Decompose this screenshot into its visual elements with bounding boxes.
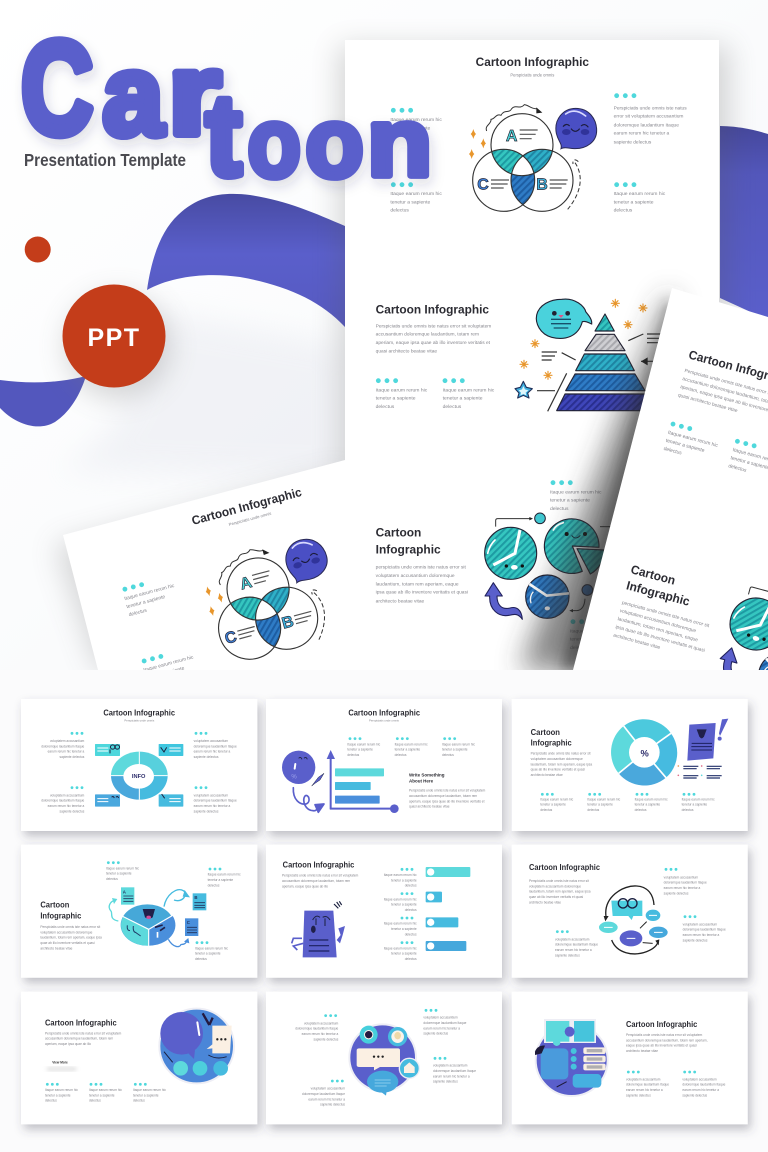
- paragraph: accusantium doloremque laudantium, totam rem: [282, 879, 351, 883]
- panel: card 1 donut: [21, 699, 257, 831]
- slide grid: [21, 699, 748, 1124]
- hero background: [0, 0, 768, 676]
- text block bottom right: tenetur a sapiente: [614, 199, 654, 205]
- panel: card 8: [266, 992, 502, 1124]
- text blocks: earum rerum hic tenetur a: [302, 1032, 339, 1036]
- text blocks: delectus: [133, 1099, 145, 1103]
- panel: tilted slide right: perspiciatis unde omnis iste natus error sit: [621, 601, 710, 629]
- chart: horizontal bars: [327, 750, 399, 813]
- text blocks: delectus: [45, 1099, 57, 1103]
- text block bottom left: [390, 182, 442, 214]
- panel: tilted slide bottom left: tenetur a sapiente: [126, 594, 166, 610]
- text blocks: tenetur a sapiente: [45, 1093, 71, 1097]
- text blocks: doloremque laudantium Itaque: [423, 1021, 467, 1025]
- panel: tilted slide bottom left: Cartoon Infographic: [190, 485, 303, 528]
- text blocks: earum rerum hic tenetur a: [683, 933, 720, 937]
- text blocks: Itaque earum rerum hic: [195, 946, 228, 950]
- text block bottom left: sapiente delectus: [60, 809, 85, 813]
- heading: Cartoon Infographic: [103, 708, 176, 717]
- panel: main slide: [345, 40, 719, 670]
- ribbon shadow: [0, 194, 345, 670]
- paragraph: Perspiciatis unde omnis iste natus error sit voluptatem: [409, 789, 485, 793]
- panel: card 9: [512, 992, 748, 1124]
- text blocks: delectus: [405, 957, 417, 961]
- paragraph: Perspiciatis unde omnis iste natus error sit voluptatem: [376, 324, 491, 329]
- text block top left: [390, 108, 442, 131]
- documents and arrows: B: [194, 895, 198, 900]
- paragraph: quae ab illo inventore veritatis et quasi: [531, 768, 585, 772]
- title: Cartoon: n: [367, 88, 432, 197]
- text blocks: tenetur a sapiente: [391, 878, 417, 882]
- panel: card 6 cycle: [512, 845, 748, 978]
- text blocks: tenetur a sapiente: [133, 1093, 159, 1097]
- text blocks: [555, 868, 726, 957]
- text block bottom right: [194, 786, 237, 813]
- text block top left: sapiente delectus: [60, 755, 85, 759]
- title: Cartoon: r: [168, 29, 221, 159]
- heading: Cartoon: [531, 727, 560, 737]
- text block top right: doloremque laudantium Itaque: [194, 744, 237, 748]
- illustration: puzzle badge: [535, 1019, 608, 1096]
- text block 3: [442, 737, 475, 757]
- text blocks row: Itaque earum rerum hic: [587, 797, 620, 801]
- paragraph: Perspiciatis unde omnis iste natus error sit voluptatem: [626, 1033, 702, 1037]
- text blocks: sapiente delectus: [682, 1093, 708, 1097]
- paragraph: Perspiciatis unde omnis iste natus error sit voluptatem: [282, 874, 358, 878]
- text block top right: doloremque laudantium Itaque: [614, 122, 679, 128]
- main slide shadow: [328, 35, 740, 464]
- paragraph: architecto beatae vitae: [376, 598, 425, 604]
- text block top left: tenetur a sapiente: [390, 125, 430, 131]
- heading: Cartoon Infographic: [348, 708, 421, 717]
- badge: PPT: [62, 284, 170, 398]
- text blocks: earum rerum hic tenetur a: [308, 1097, 345, 1101]
- text block 3: tenetur a sapiente: [442, 748, 468, 752]
- text block 1: tenetur a sapiente: [347, 748, 373, 752]
- text block bottom right: sapiente delectus: [194, 809, 219, 813]
- text blocks row: tenetur a sapiente: [682, 803, 707, 807]
- text block bottom right: doloremque laudantium Itaque: [194, 799, 237, 803]
- heading: Cartoon: [376, 526, 421, 540]
- text block lower: Itaque earum rerum hic: [570, 628, 622, 634]
- text blocks: [626, 1071, 726, 1097]
- text blocks: Itaque earum rerum hic: [106, 866, 139, 870]
- text block bottom left: [41, 786, 85, 813]
- panel: tilted slide right: delectus: [663, 446, 683, 457]
- text block bottom left: Itaque earum rerum hic: [390, 191, 442, 197]
- text block bottom right: [614, 182, 666, 214]
- text block 3: delectus: [442, 753, 454, 757]
- panel: tilted slide bottom left: delectus: [128, 608, 148, 618]
- chart: venn diagram: [469, 105, 597, 213]
- panel: tilted slide right: quasi architecto beatae vitae: [677, 392, 738, 414]
- text block 2: delectus: [395, 753, 407, 757]
- arrow: squiggle: [293, 788, 324, 812]
- text blocks row: Itaque earum rerum hic: [540, 797, 573, 801]
- text blocks: voluptatem accusantium: [682, 1077, 717, 1081]
- text blocks: earum rerum hic tenetur a: [423, 1026, 460, 1030]
- text blocks: doloremque laudantium Itaque: [664, 881, 707, 885]
- text block top left: voluptatem accusantium: [50, 739, 84, 743]
- character: document: [677, 719, 728, 778]
- heading: Cartoon Infographic: [529, 863, 601, 872]
- panel: tilted slide bottom left: Perspiciatis unde omnis: [228, 511, 272, 527]
- paragraph: perspiciatis unde omnis iste natus error sit: [376, 566, 466, 571]
- panel: card 3 pie: Infographic: [531, 738, 572, 748]
- paragraph: accusantium doloremque laudantium, totam rem: [45, 1037, 114, 1041]
- text blocks row: delectus: [540, 808, 553, 812]
- button: [47, 1061, 77, 1070]
- text block 1: [347, 737, 381, 757]
- text blocks: voluptatem accusantium: [555, 937, 589, 941]
- panel: card 2 bar chart: [266, 699, 502, 831]
- text block top left: Itaque earum rerum hic: [390, 117, 442, 123]
- text block left: delectus: [376, 404, 395, 410]
- text blocks: tenetur a sapiente: [391, 952, 417, 956]
- panel: tilted slide bottom left: B: [280, 613, 296, 633]
- paragraph: voluptatem accusantium doloremque: [529, 884, 581, 888]
- panel: card 7: [21, 992, 257, 1124]
- panel: card 1 donut: Perspiciatis unde omnis: [124, 718, 155, 722]
- text block bottom right: delectus: [614, 208, 633, 214]
- text block top right: voluptatem accusantium: [194, 739, 228, 743]
- text blocks row: delectus: [587, 808, 600, 812]
- text blocks: doloremque laudantium Itaque: [626, 1083, 669, 1087]
- paragraph: quasi architecto beatae vitae: [376, 349, 437, 355]
- text block right: Itaque earum rerum hic: [443, 387, 494, 393]
- paragraph: architecto beatae vitae: [531, 773, 563, 777]
- text block top left: [41, 732, 85, 759]
- panel: tilted slide bottom left: [63, 460, 345, 670]
- heading: Cartoon: [40, 899, 69, 909]
- paragraph: Perspiciatis unde omnis iste natus error sit voluptatem: [45, 1031, 121, 1035]
- chart: progress bars: [426, 867, 470, 951]
- panel: card 5 progress bars: [266, 845, 502, 978]
- text block right: tenetur a sapiente: [443, 396, 483, 402]
- paragraph: architecto beatae vitae: [40, 946, 73, 950]
- heading: Infographic: [376, 542, 441, 556]
- illustration: chat badge: [159, 1009, 234, 1083]
- text blocks: Itaque earum rerum hic: [208, 873, 241, 877]
- purple ribbon lower left: [0, 376, 86, 426]
- text block top right: sapiente delectus: [194, 755, 219, 759]
- panel: tilted slide right: ipsa quae ab illo inventore veritatis et quasi: [615, 624, 705, 654]
- text blocks: earum rerum hic tenetur a: [664, 886, 701, 890]
- text block top right: Perspiciatis unde omnis iste natus: [614, 106, 687, 111]
- text blocks: Itaque earum rerum hic: [45, 1088, 78, 1092]
- text blocks: delectus: [89, 1099, 101, 1103]
- text blocks: Itaque earum rerum hic: [384, 897, 417, 901]
- paragraph: accusantium doloremque laudantium, totam rem: [376, 332, 479, 338]
- paragraph: voluptatem accusantium doloremque: [531, 757, 583, 761]
- text block top right: [614, 93, 687, 145]
- purple band right: [720, 126, 768, 320]
- panel: tilted slide bottom left: tenetur a sapiente: [145, 665, 185, 682]
- title: Cartoon: o: [306, 89, 364, 198]
- text blocks: sapiente delectus: [683, 938, 708, 942]
- text block right: delectus: [443, 404, 462, 410]
- panel: card 4 3-part pie: [21, 845, 257, 978]
- text block 2: tenetur a sapiente: [395, 748, 420, 752]
- text blocks: voluptatem accusantium: [423, 1016, 458, 1020]
- chart: cycle diagram: [599, 886, 668, 954]
- title: Cartoon: t: [206, 71, 242, 200]
- panel: tilted slide right: voluptatem accusantium doloremque: [619, 608, 697, 634]
- tilted slide shadow: [55, 470, 345, 670]
- text blocks: Itaque earum rerum hic: [89, 1088, 122, 1092]
- text block bottom left: voluptatem accusantium: [50, 793, 84, 797]
- paragraph: quae ab illo inventore veritatis et quasi: [40, 941, 95, 945]
- paragraph: aperiam, eaque ipsa quae ab illo inventore veritatis et: [376, 340, 491, 346]
- section: pyramid slide: [376, 299, 662, 411]
- title: Cartoon: [21, 14, 432, 200]
- text block top right: error sit voluptatem accusantium: [614, 114, 683, 120]
- text blocks: voluptatem accusantium: [664, 875, 698, 879]
- text blocks row: [540, 793, 715, 812]
- heading: Cartoon Infographic: [283, 861, 355, 870]
- text blocks row: delectus: [635, 808, 647, 812]
- panel: tilted slide right: delectus: [728, 463, 748, 474]
- paragraph: laudantium, totam rem aperiam, eaque: [376, 581, 459, 587]
- text blocks: tenetur a sapiente: [208, 878, 233, 882]
- paragraph: architecto beatae vitae: [626, 1049, 658, 1053]
- paragraph: voluptatem accusantium doloremque: [40, 930, 93, 934]
- panel: card 3 pie: [512, 699, 748, 831]
- text blocks: earum rerum hic tenetur a: [682, 1088, 719, 1092]
- paragraph: ipsa quae ab illo inventore veritatis et quasi: [376, 590, 468, 596]
- panel: tilted slide right: Infographic: [625, 578, 691, 609]
- heading: Cartoon Infographic: [376, 302, 489, 316]
- text block: [550, 480, 602, 512]
- button: View More: [52, 1061, 68, 1065]
- text blocks row: tenetur a sapiente: [635, 803, 660, 807]
- documents and arrows: [109, 887, 206, 947]
- text block 2: [395, 737, 428, 757]
- panel: tilted slide bottom left: Itaque earum rerum hic: [124, 583, 175, 602]
- section: pie slide: [376, 480, 622, 651]
- text blocks: Itaque earum rerum hic: [384, 922, 417, 926]
- text block top right: sapiente delectus: [614, 139, 652, 145]
- section: venn slide: [390, 55, 687, 214]
- chart: venn diagram: C: [477, 177, 489, 194]
- text block top left: doloremque laudantium Itaque: [41, 744, 85, 748]
- text blocks: sapiente delectus: [423, 1032, 449, 1036]
- text blocks: earum rerum hic tenetur a: [555, 948, 592, 952]
- panel: card 2 bar chart: Perspiciatis unde omnis: [369, 718, 400, 722]
- text blocks: sapiente delectus: [314, 1037, 339, 1041]
- text block: delectus: [550, 506, 569, 512]
- chart: donut: %: [641, 748, 650, 758]
- text blocks: sapiente delectus: [664, 891, 689, 895]
- panel: tilted slide bottom left: A: [238, 574, 254, 593]
- character: purple bubble: %: [291, 774, 297, 780]
- text blocks: voluptatem accusantium: [683, 922, 717, 926]
- subheading: Perspiciatis unde omnis: [510, 72, 554, 77]
- text block bottom right: Itaque earum rerum hic: [614, 191, 665, 197]
- text blocks row: tenetur a sapiente: [540, 803, 566, 807]
- labels around donut: [95, 744, 183, 807]
- text blocks: doloremque laudantium Itaque: [682, 1083, 726, 1087]
- character: document: [292, 901, 345, 957]
- text blocks: voluptatem accusantium: [311, 1087, 345, 1091]
- text block right: [443, 378, 495, 410]
- text blocks: tenetur a sapiente: [391, 927, 417, 931]
- paragraph: voluptatem accusantium doloremque: [376, 573, 455, 579]
- text blocks row: tenetur a sapiente: [587, 803, 613, 807]
- text block: tenetur a sapiente: [550, 498, 590, 504]
- chart: pyramid: [515, 299, 662, 411]
- chart: info donut: [111, 752, 168, 800]
- panel: tilted slide right: [573, 288, 768, 670]
- text block lower: delectus: [570, 645, 589, 651]
- subtitle: Presentation Template: [24, 150, 186, 170]
- paragraph: quae ab illo inventore veritatis et quasi: [529, 895, 584, 899]
- paragraph: Perspiciatis unde omnis iste natus error sit: [531, 752, 591, 756]
- paragraph: laudantium, totam rem aperiam, eaque ipsa: [529, 890, 591, 894]
- text blocks: [106, 861, 241, 961]
- text block lower: tenetur a sapiente: [570, 637, 610, 643]
- text blocks: delectus: [195, 957, 207, 961]
- text block 2: Itaque earum rerum hic: [395, 742, 428, 746]
- sub heading: About Here: [409, 778, 434, 783]
- text blocks: tenetur a sapiente: [89, 1093, 115, 1097]
- text blocks: earum rerum hic tenetur a: [433, 1074, 470, 1078]
- heading: [376, 526, 441, 556]
- paragraph: aperiam, eaque ipsa quae ab illo: [282, 884, 328, 888]
- panel: card 4 3-part pie: Infographic: [40, 911, 81, 921]
- heading: Cartoon Infographic: [45, 1018, 117, 1027]
- documents and arrows: A: [123, 889, 127, 894]
- panel: tilted slide right: tenetur a sapiente: [665, 438, 705, 454]
- text blocks: tenetur a sapiente: [391, 903, 417, 907]
- paragraph: aperiam, eaque ipsa quae ab illo inventore veritatis et: [409, 799, 485, 803]
- text block 1: Itaque earum rerum hic: [347, 742, 380, 746]
- paragraph: aperiam, eaque ipsa quae ab illo: [45, 1042, 91, 1046]
- text blocks: delectus: [106, 877, 118, 881]
- title: Cartoon: o: [248, 88, 301, 198]
- tilted slide shadow on main: [520, 292, 675, 670]
- text block bottom right: earum rerum hic tenetur a: [194, 804, 231, 808]
- paragraph: accusantium doloremque laudantium, totam rem aperiam,: [626, 1038, 708, 1042]
- text blocks: voluptatem accusantium: [433, 1064, 467, 1068]
- panel: tilted slide bottom left: C: [223, 628, 239, 648]
- text block bottom left: delectus: [390, 208, 409, 214]
- text block left: tenetur a sapiente: [376, 396, 416, 402]
- paragraph: quasi architecto beatae vitae: [409, 805, 450, 809]
- text blocks: [295, 1009, 476, 1107]
- text blocks: doloremque laudantium Itaque: [555, 943, 598, 947]
- text blocks row: Itaque earum rerum hic: [682, 797, 715, 801]
- text block bottom left: earum rerum hic tenetur a: [48, 804, 85, 808]
- text block top right: earum rerum hic tenetur a: [614, 131, 670, 137]
- chart: pies: [485, 513, 612, 619]
- character: purple bubble: [282, 751, 324, 786]
- title: Cartoon: a: [102, 30, 165, 159]
- heading: Cartoon Infographic: [476, 55, 589, 69]
- title: Cartoon: C: [21, 14, 93, 162]
- paragraph: accusantium doloremque laudantium, totam rem: [409, 794, 478, 798]
- text block lower: [570, 619, 622, 651]
- chart: venn diagram: B: [536, 177, 548, 194]
- illustration: badge: [349, 1024, 419, 1096]
- text blocks: tenetur a sapiente: [195, 952, 221, 956]
- panel: tilted slide right: laudantium, totam rem aperiam, eaque: [617, 616, 699, 643]
- paragraph: Perspiciatis unde omnis iste natus error sit: [40, 925, 100, 929]
- text block 3: Itaque earum rerum hic: [442, 742, 475, 746]
- text blocks: [45, 1083, 166, 1103]
- text blocks: delectus: [405, 884, 417, 888]
- text blocks: sapiente delectus: [626, 1093, 651, 1097]
- icon: small red dot: [25, 236, 51, 262]
- text blocks row: Itaque earum rerum hic: [635, 797, 668, 801]
- text block top left: earum rerum hic tenetur a: [48, 750, 85, 754]
- panel: tilted slide bottom left: Itaque earum rerum hic: [143, 654, 194, 674]
- heading: Cartoon Infographic: [626, 1020, 698, 1029]
- paragraph: laudantium, totam rem aperiam, eaque ipsa: [531, 762, 592, 766]
- text block bottom left: tenetur a sapiente: [390, 199, 430, 205]
- text block top right: earum rerum hic tenetur a: [194, 750, 231, 754]
- text blocks: Itaque earum rerum hic: [384, 946, 417, 950]
- text blocks: doloremque laudantium Itaque: [683, 928, 726, 932]
- chart: pie character: [121, 904, 175, 946]
- sub heading: Write Something: [409, 773, 445, 778]
- text blocks: sapiente delectus: [320, 1103, 345, 1107]
- chart: venn diagram: A: [506, 128, 518, 145]
- text blocks: Itaque earum rerum hic: [384, 873, 417, 877]
- paragraph: architecto beatae vitae: [529, 900, 561, 904]
- text block 1: delectus: [347, 753, 360, 757]
- text blocks: sapiente delectus: [555, 953, 580, 957]
- text blocks: delectus: [405, 908, 417, 912]
- text blocks: delectus: [405, 932, 417, 936]
- text block left: [376, 378, 428, 410]
- text blocks: [384, 868, 417, 961]
- chart: info donut: INFO: [132, 774, 146, 780]
- text blocks row: delectus: [682, 808, 694, 812]
- text blocks: tenetur a sapiente: [106, 872, 132, 876]
- text blocks: voluptatem accusantium: [626, 1077, 660, 1081]
- badge: PPT: PPT: [87, 324, 141, 352]
- paragraph: laudantium, totam rem aperiam, eaque ipsa: [40, 936, 102, 940]
- purple ribbon centre: [147, 194, 345, 327]
- text blocks: voluptatem accusantium: [304, 1021, 338, 1025]
- text blocks: doloremque laudantium Itaque: [302, 1092, 345, 1096]
- paragraph: eaque ipsa quae ab illo inventore veritatis et quasi: [626, 1044, 697, 1048]
- text block bottom left: doloremque laudantium Itaque: [41, 799, 85, 803]
- text block: Itaque earum rerum hic: [550, 489, 602, 495]
- text blocks: doloremque laudantium Itaque: [295, 1027, 339, 1031]
- text blocks: Itaque earum rerum hic: [133, 1088, 166, 1092]
- text block left: Itaque earum rerum hic: [376, 387, 427, 393]
- text blocks: delectus: [208, 883, 220, 887]
- documents and arrows: C: [187, 920, 190, 925]
- paragraph: Perspiciatis unde omnis iste natus error sit: [529, 879, 589, 883]
- panel: tilted slide right: Cartoon: [629, 562, 677, 588]
- chart: donut: [611, 719, 677, 786]
- panel: tilted slide right: Itaque earum rerum hic: [667, 430, 719, 449]
- panel: tilted slide right: architecto beatae vitae: [612, 633, 661, 651]
- text blocks: earum rerum hic tenetur a: [626, 1088, 663, 1092]
- text blocks: doloremque laudantium Itaque: [433, 1069, 476, 1073]
- text block top right: [194, 732, 237, 759]
- text blocks: sapiente delectus: [433, 1080, 458, 1084]
- text block bottom right: voluptatem accusantium: [194, 793, 228, 797]
